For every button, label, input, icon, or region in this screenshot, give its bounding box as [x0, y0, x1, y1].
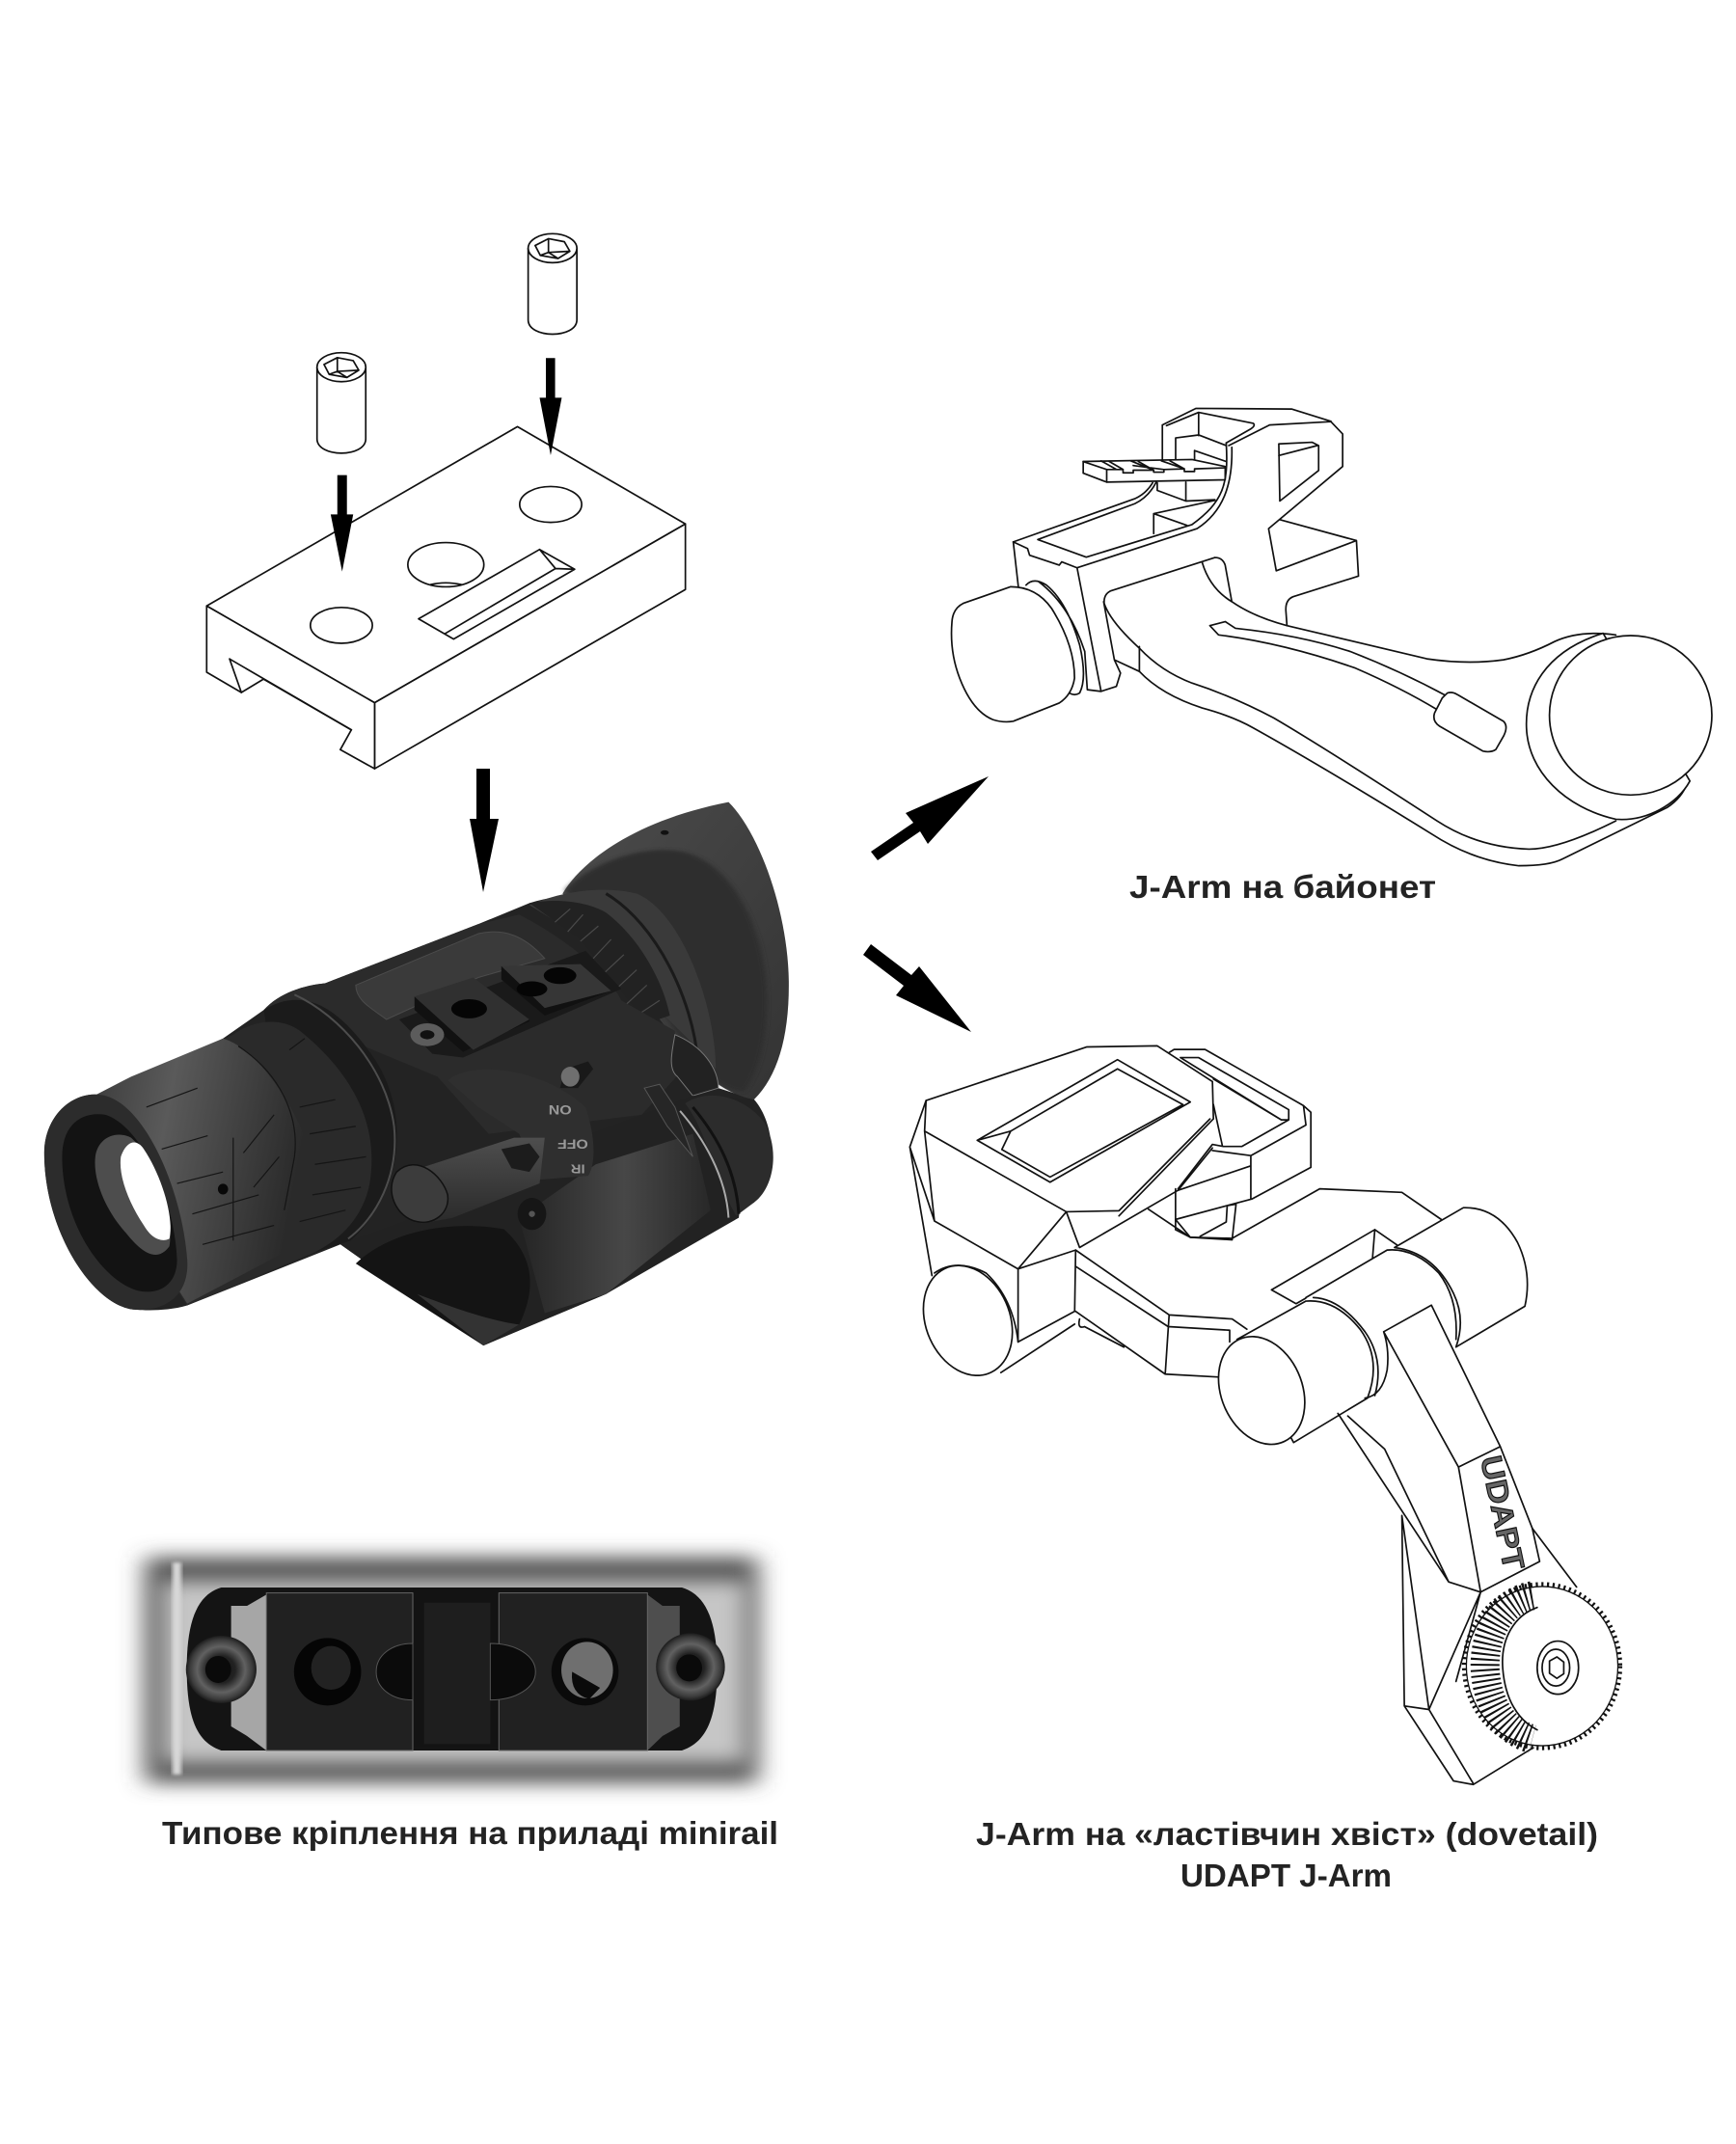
illustration: J-Arm bayonet: [952, 408, 1712, 866]
minirail on body: [399, 951, 621, 1058]
caption: dovetail: J-Arm на «ластівчин хвіст» (dovetail): [976, 1816, 1598, 1852]
top block: [909, 1045, 1213, 1342]
right wedge: [647, 1594, 680, 1750]
thumb wheel: [1464, 1585, 1620, 1748]
arm latch tab: [1434, 692, 1506, 751]
rear hook frame: [1162, 408, 1331, 463]
objective collar: [264, 994, 397, 1252]
arrow: to bayonet J-Arm: [871, 776, 989, 860]
left screw head: [186, 1636, 257, 1703]
top window: [977, 1060, 1190, 1182]
right rail block: [490, 1593, 647, 1750]
arm: [1338, 1305, 1539, 1592]
IR illuminator knob: [392, 1138, 546, 1230]
objective lens: [44, 1095, 187, 1310]
caption: minirail: Типове кріплення на приладі minirail: [162, 1815, 778, 1851]
caption: bayonet: J-Arm на байонет: [1129, 869, 1436, 905]
far cylinder: [1395, 1208, 1528, 1347]
hook body: [1229, 421, 1359, 626]
connecting body: [1075, 1189, 1441, 1377]
photo: night vision monocular: [44, 802, 789, 1345]
photo: minirail close-up: [146, 1558, 757, 1782]
knob rings: [1026, 581, 1085, 694]
caption: UDAPT J-Arm: UDAPT J-Arm: [1180, 1858, 1392, 1893]
picatinny rail: [1083, 459, 1225, 482]
arm groove: [1209, 622, 1448, 710]
under-rail block: [1153, 482, 1215, 533]
lower housing: [340, 1096, 754, 1345]
left wedge: [231, 1594, 266, 1750]
round end: [1527, 634, 1712, 820]
left screw: [317, 353, 366, 453]
top deck: [1014, 443, 1232, 568]
right screw head: [656, 1633, 725, 1700]
arrow: into right hole: [539, 358, 561, 455]
block body: [206, 426, 686, 769]
hook window: [1279, 443, 1318, 502]
panel: mounting block with screws: [206, 233, 686, 769]
illustration: UDAPT dovetail J-Arm: [907, 1045, 1620, 1784]
centre channel: [413, 1588, 499, 1747]
near cylinder: [1203, 1297, 1378, 1459]
left rail block: [266, 1593, 413, 1750]
lower body: [1402, 1515, 1577, 1784]
left knob: [952, 586, 1074, 721]
switch housing: OFF: [557, 1136, 588, 1152]
battery cap: [644, 1084, 773, 1218]
switch housing: IR: [571, 1161, 585, 1177]
main body: [264, 914, 676, 1134]
arrow: into left hole: [331, 475, 353, 572]
vignette: [146, 1558, 757, 1782]
centre hub: [1306, 1250, 1456, 1400]
right screw: [529, 233, 577, 334]
arrow: block down to monocular: [470, 769, 499, 892]
left cylinder: [907, 1250, 1074, 1391]
rear frame: [1169, 1049, 1311, 1240]
brand mark on arm: UDAPT: [1474, 1452, 1531, 1573]
block behind cross bar: [1271, 1230, 1397, 1304]
switch housing: [448, 1070, 593, 1180]
eyepiece rings: [529, 890, 716, 1069]
objective focus barrel: [60, 1021, 371, 1306]
rail plate: [187, 1588, 718, 1750]
arrow: to dovetail J-Arm: [863, 944, 971, 1032]
silhouette: [44, 895, 772, 1345]
side block: [1014, 542, 1139, 692]
rear strap clip: [671, 1035, 719, 1096]
arm: [1104, 557, 1688, 866]
eyecup: [562, 802, 789, 1099]
switch housing: ON: [549, 1101, 572, 1117]
